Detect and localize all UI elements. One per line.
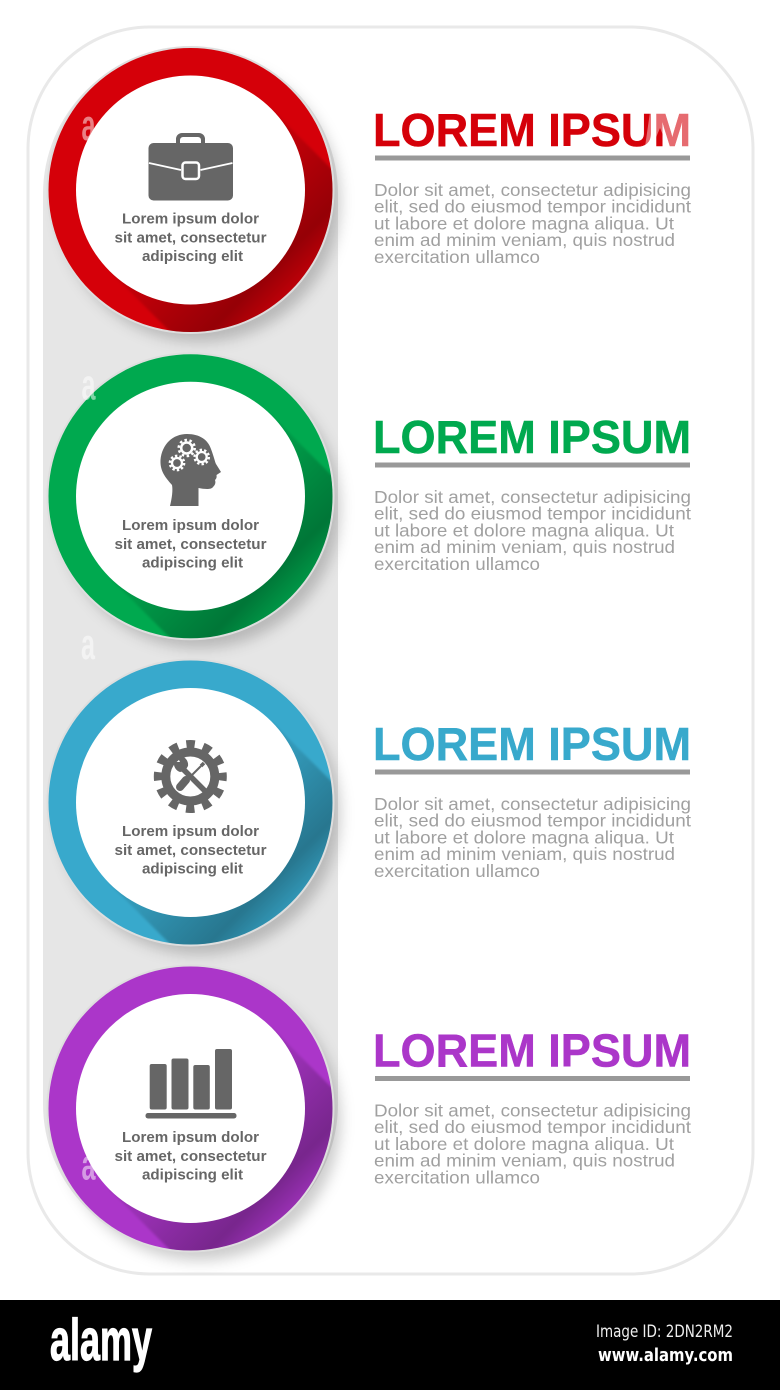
body text: blue: Dolor sit amet, consectetur adipisicing	[374, 794, 691, 814]
panel: purple circle	[48, 966, 347, 1267]
body text: red: Dolor sit amet, consectetur adipisicing	[374, 180, 691, 200]
rule: blue	[375, 770, 690, 774]
caption: red: adipiscing elit	[142, 249, 243, 265]
body text: purple	[374, 1100, 691, 1187]
body text: purple: elit, sed do eiusmod tempor incididunt	[374, 1117, 691, 1137]
grey vertical strip	[43, 48, 338, 1250]
body text: green: enim ad minim veniam, quis nostrud	[374, 537, 675, 557]
body text: blue: ut labore et dolore magna aliqua. Ut	[374, 827, 674, 847]
white disc	[76, 994, 305, 1223]
caption: blue: sit amet, consectetur	[114, 843, 267, 859]
body text: red: enim ad minim veniam, quis nostrud	[374, 230, 675, 250]
caption: blue: Lorem ipsum dolor	[122, 824, 259, 840]
panel: green circle	[48, 354, 347, 654]
body text: red: exercitation ullamco	[374, 247, 540, 267]
body text: purple: Dolor sit amet, consectetur adipisicing	[374, 1100, 691, 1120]
panel: blue circle	[48, 660, 347, 960]
caption: green: adipiscing elit	[142, 555, 243, 571]
body text: red: elit, sed do eiusmod tempor incididunt	[374, 197, 691, 217]
white disc	[76, 76, 305, 304]
panel: red circle	[48, 46, 347, 348]
body text: green	[374, 487, 691, 574]
body text: blue: enim ad minim veniam, quis nostrud	[374, 844, 675, 864]
body text: blue	[374, 794, 691, 881]
body text: purple: enim ad minim veniam, quis nostrud	[374, 1151, 675, 1171]
heading: purple: LOREM IPSUM	[373, 1024, 691, 1076]
caption: green	[114, 518, 267, 571]
heading: green: LOREM IPSUM	[373, 411, 691, 463]
body text: green: Dolor sit amet, consectetur adipisicing	[374, 487, 691, 507]
body text: purple: exercitation ullamco	[374, 1167, 540, 1187]
body text: blue: elit, sed do eiusmod tempor incididunt	[374, 811, 691, 831]
icon: head with gears	[160, 434, 221, 506]
caption: red	[114, 212, 267, 265]
icon: bar chart	[146, 1049, 236, 1118]
watermark letter on strip: a	[81, 620, 95, 669]
caption: green: sit amet, consectetur	[114, 537, 267, 553]
caption: purple	[114, 1130, 267, 1184]
body text: red	[374, 180, 691, 267]
rule: green	[375, 462, 690, 468]
caption: purple: Lorem ipsum dolor	[122, 1130, 259, 1146]
purple ring	[48, 966, 332, 1250]
watermark letter: a	[82, 101, 96, 150]
caption: purple: sit amet, consectetur	[114, 1149, 267, 1165]
caption: purple: adipiscing elit	[142, 1168, 243, 1184]
icon: briefcase	[148, 133, 233, 200]
body text: purple: ut labore et dolore magna aliqua. Ut	[374, 1134, 674, 1154]
icon: gear with tools	[158, 744, 223, 809]
rule: purple	[375, 1076, 690, 1081]
rule: red	[375, 156, 690, 160]
green ring	[48, 354, 332, 638]
white disc	[76, 688, 305, 917]
watermark letter: a	[82, 360, 96, 409]
body text: green: exercitation ullamco	[374, 554, 540, 574]
footer bar	[0, 1300, 780, 1390]
body text: green: ut labore et dolore magna aliqua. Ut	[374, 520, 674, 540]
image id: Image ID: 2DN2RM2	[596, 1322, 733, 1341]
body text: green: elit, sed do eiusmod tempor incididunt	[374, 504, 691, 524]
heading: blue: LOREM IPSUM	[373, 718, 691, 770]
caption: blue: adipiscing elit	[142, 862, 243, 878]
red ring	[48, 48, 332, 332]
heading: red: LOREM IPSUM	[373, 104, 691, 156]
white disc	[76, 382, 305, 611]
body text: red: ut labore et dolore magna aliqua. Ut	[374, 213, 674, 233]
website: www.alamy.com	[598, 1346, 733, 1366]
watermark over heading	[645, 112, 692, 147]
caption: red: Lorem ipsum dolor	[122, 212, 259, 228]
caption: blue	[114, 824, 267, 878]
body text: blue: exercitation ullamco	[374, 861, 540, 881]
caption: red: sit amet, consectetur	[114, 230, 267, 246]
logo: alamy: alamy	[50, 1308, 152, 1373]
watermark letter: a	[82, 1140, 96, 1190]
blue ring	[48, 660, 332, 944]
caption: green: Lorem ipsum dolor	[122, 518, 259, 534]
